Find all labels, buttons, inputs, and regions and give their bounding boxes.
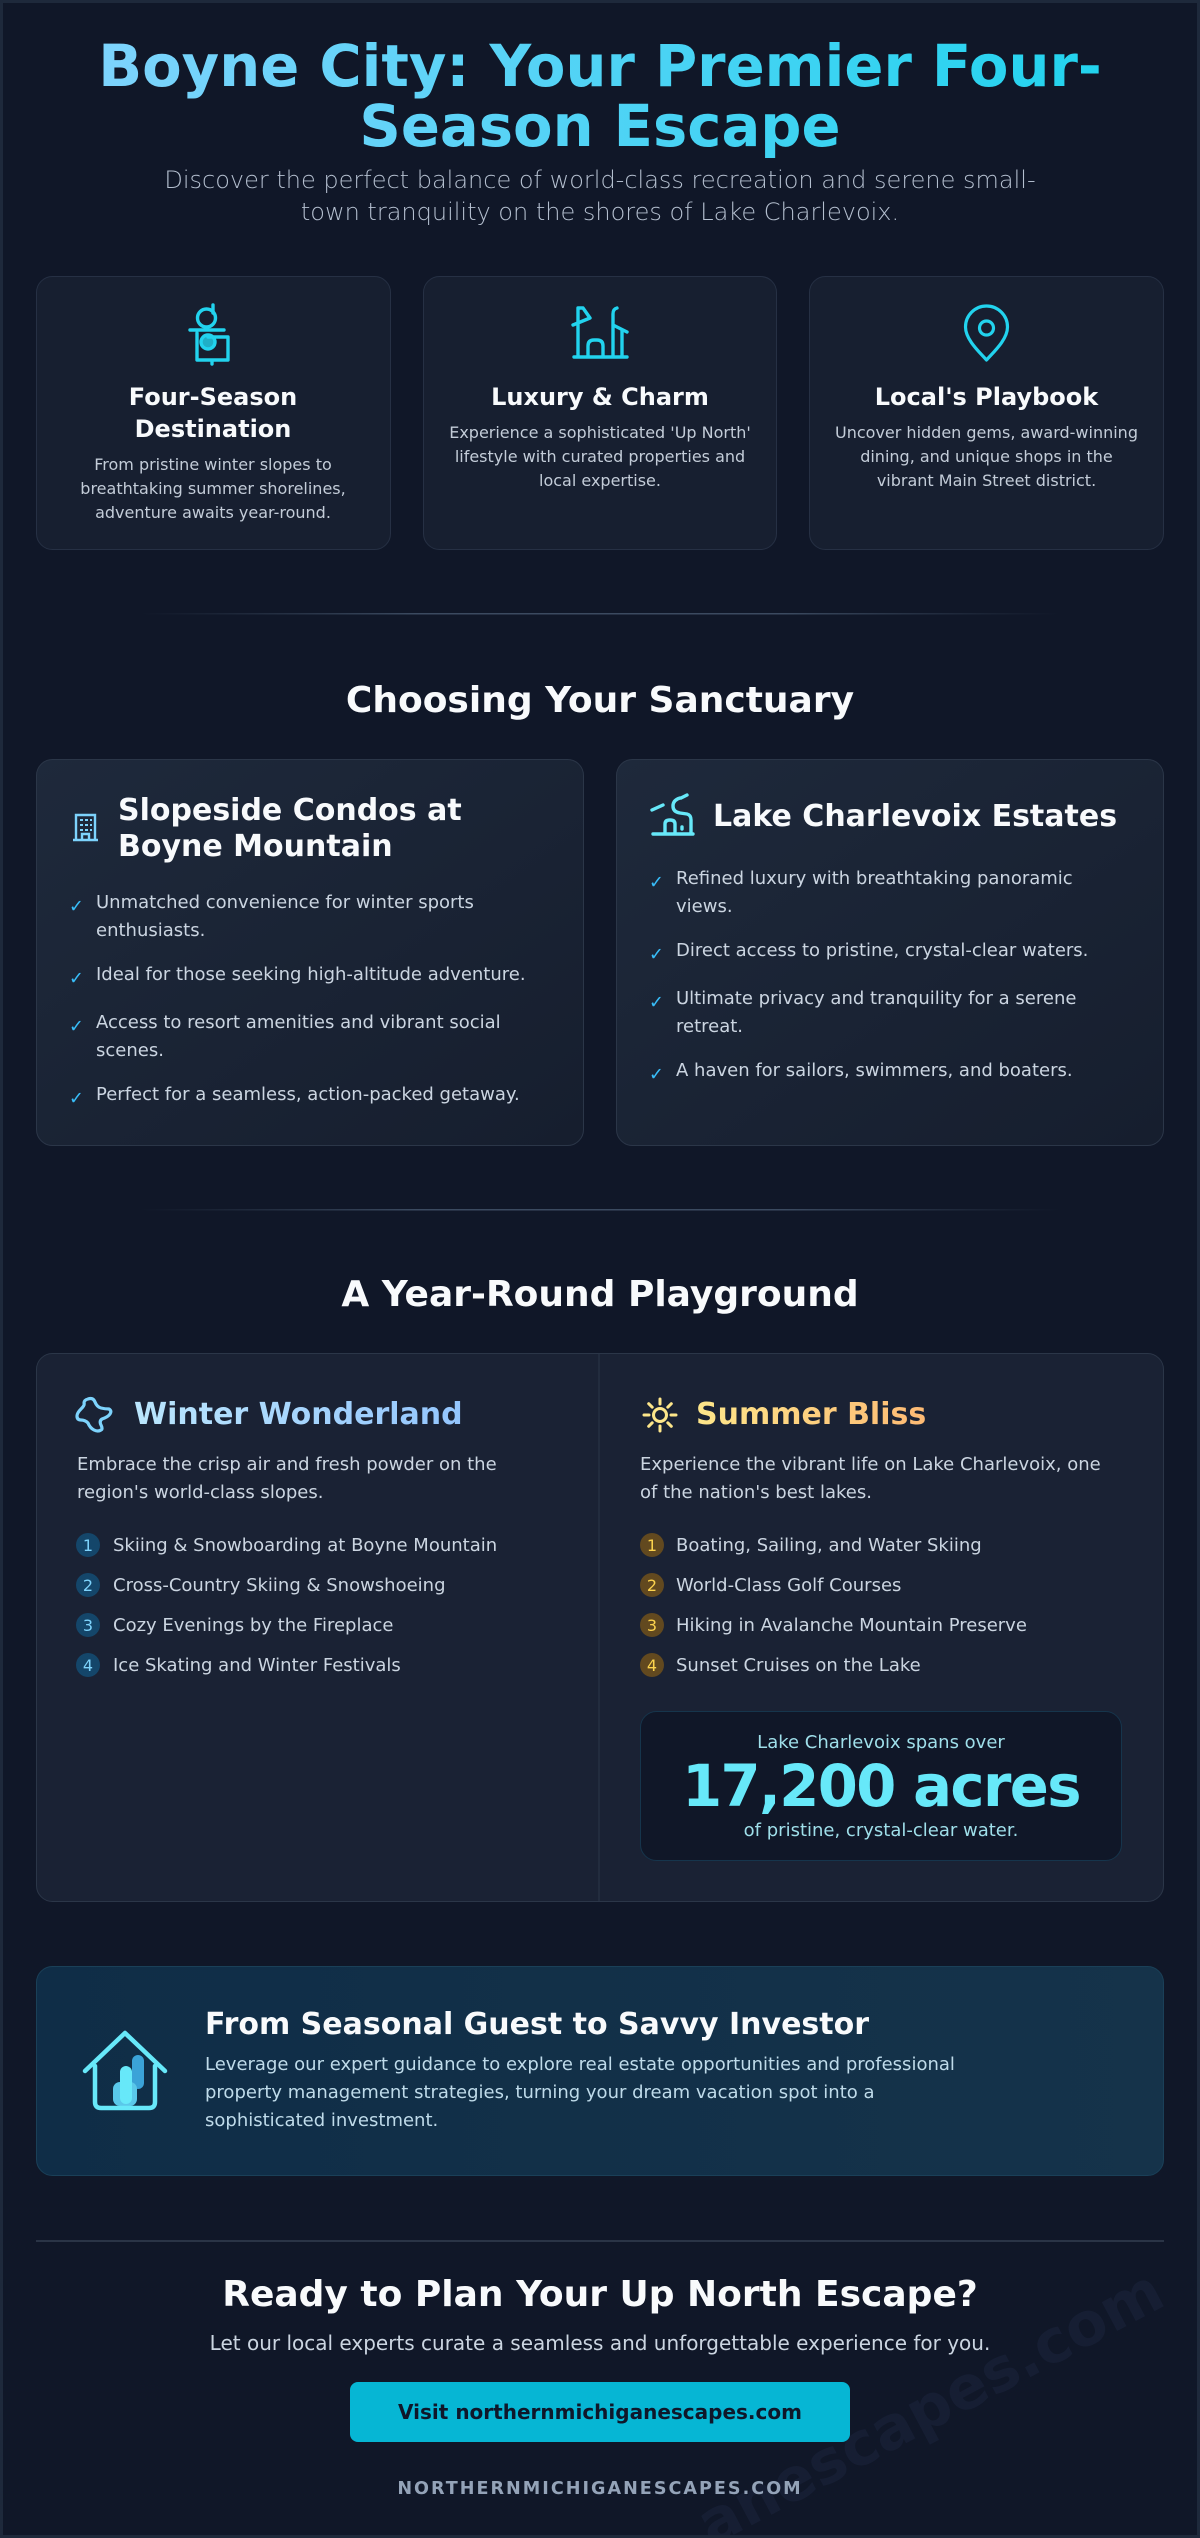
numbered list: 2 xyxy=(83,1576,93,1595)
description: Leverage our expert guidance to explore real estate opportunities and professional xyxy=(205,2054,955,2075)
heading: call to action: Ready to Plan Your Up North Escape? xyxy=(222,2274,978,2315)
checklist: ✓ xyxy=(649,1065,664,1085)
numbered list: Hiking in Avalanche Mountain Preserve xyxy=(676,1615,1027,1636)
description xyxy=(80,455,346,522)
numbered list: World-Class Golf Courses xyxy=(676,1575,901,1596)
summer column xyxy=(640,1397,1122,1860)
icon: snow xyxy=(77,1398,111,1431)
heading: Luxury & Charm xyxy=(491,383,709,411)
description: of the nation's best lakes. xyxy=(640,1482,872,1503)
heading: Local's Playbook xyxy=(875,383,1099,411)
heading: Summer Bliss xyxy=(696,1397,926,1432)
button: Visit northernmichiganescapes.com xyxy=(398,2400,802,2424)
description xyxy=(640,1454,1101,1503)
subtitle: town tranquility on the shores of Lake Charlevoix. xyxy=(301,198,899,226)
checklist: ✓ xyxy=(69,1017,84,1037)
checklist: ✓ xyxy=(649,873,664,893)
checklist: Ultimate privacy and tranquility for a serene xyxy=(676,988,1076,1009)
icon: sun xyxy=(644,1399,676,1431)
checklist: ✓ xyxy=(649,945,664,965)
numbered list: Boating, Sailing, and Water Skiing xyxy=(676,1535,982,1556)
numbered list: 4 xyxy=(647,1656,657,1675)
title xyxy=(98,33,1102,160)
numbered list: 1 xyxy=(647,1536,657,1555)
panel: luxury and charm xyxy=(424,276,776,550)
checklist: Direct access to pristine, crystal-clear waters. xyxy=(676,940,1088,961)
numbered list: 2 xyxy=(647,1576,657,1595)
heading xyxy=(118,793,462,864)
heading: Four-Season xyxy=(129,383,297,411)
heading: Slopeside Condos at xyxy=(118,793,462,828)
button xyxy=(350,2382,850,2442)
winter column xyxy=(76,1397,497,1677)
checklist: ✓ xyxy=(69,1089,84,1109)
icon: building xyxy=(73,815,98,840)
description: property management strategies, turning your dream vacation spot into a xyxy=(205,2082,875,2103)
numbered list: 3 xyxy=(83,1616,93,1635)
description: region's world-class slopes. xyxy=(77,1482,323,1503)
checklist: Refined luxury with breathtaking panoramic xyxy=(676,868,1073,889)
description xyxy=(77,1454,497,1503)
description: Experience a sophisticated 'Up North' xyxy=(449,423,751,442)
checklist: Perfect for a seamless, action-packed getaway. xyxy=(96,1084,520,1105)
checklist: scenes. xyxy=(96,1040,164,1061)
checklist: Unmatched convenience for winter sports xyxy=(96,892,474,913)
description xyxy=(449,423,751,490)
heading: From Seasonal Guest to Savvy Investor xyxy=(205,2007,869,2042)
checklist: retreat. xyxy=(676,1016,743,1037)
numbered list xyxy=(640,1533,1027,1677)
description: Uncover hidden gems, award-winning xyxy=(835,423,1138,442)
numbered list: Skiing & Snowboarding at Boyne Mountain xyxy=(113,1535,497,1556)
numbered list: 4 xyxy=(83,1656,93,1675)
subtitle xyxy=(164,166,1036,226)
heading: a year-round playground: A Year-Round Playground xyxy=(341,1274,859,1315)
checklist: views. xyxy=(676,896,733,917)
checklist: A haven for sailors, swimmers, and boaters. xyxy=(676,1060,1073,1081)
numbered list: 3 xyxy=(647,1616,657,1635)
panel: lake charlevoix estates xyxy=(616,760,1164,1146)
numbered list xyxy=(76,1533,497,1677)
icon: lakefront xyxy=(652,795,693,834)
panel: slopeside condos xyxy=(36,760,584,1146)
checklist: ✓ xyxy=(69,897,84,917)
callout: lake size: Lake Charlevoix spans over xyxy=(757,1732,1005,1753)
checklist xyxy=(69,892,526,1109)
panel: local's playbook xyxy=(810,276,1164,550)
heading: Destination xyxy=(135,415,291,443)
numbered list: Sunset Cruises on the Lake xyxy=(676,1655,921,1676)
title: Season Escape xyxy=(359,93,841,160)
icon: luxury xyxy=(573,308,627,357)
description: vibrant Main Street district. xyxy=(877,471,1096,490)
heading: Boyne Mountain xyxy=(118,829,393,864)
description: adventure awaits year-round. xyxy=(95,503,331,522)
heading: Winter Wonderland xyxy=(134,1397,463,1432)
text: call to action: Let our local experts curate a seamless and unforgettable experience for you. xyxy=(210,2331,990,2355)
checklist: ✓ xyxy=(649,993,664,1013)
panel: seasons xyxy=(36,1354,1164,1902)
checklist: ✓ xyxy=(69,969,84,989)
numbered list: 1 xyxy=(83,1536,93,1555)
title: Boyne City: Your Premier Four- xyxy=(98,33,1102,100)
numbered list: Ice Skating and Winter Festivals xyxy=(113,1655,401,1676)
checklist: Ideal for those seeking high-altitude adventure. xyxy=(96,964,526,985)
description: From pristine winter slopes to xyxy=(94,455,332,474)
description xyxy=(205,2054,955,2131)
callout: lake size xyxy=(640,1712,1122,1860)
icon: house with chart xyxy=(85,2033,165,2108)
subtitle: Discover the perfect balance of world-class recreation and serene small- xyxy=(164,166,1036,194)
description: Experience the vibrant life on Lake Charlevoix, one xyxy=(640,1454,1101,1475)
panel: four-season destination xyxy=(36,276,390,550)
callout: lake size: of pristine, crystal-clear water. xyxy=(744,1820,1018,1841)
heading: choosing your sanctuary: Choosing Your Sanctuary xyxy=(346,680,854,721)
description: dining, and unique shops in the xyxy=(860,447,1113,466)
icon: map pin xyxy=(966,306,1008,360)
description: breathtaking summer shorelines, xyxy=(80,479,346,498)
icon: four-season xyxy=(190,305,228,364)
description: sophisticated investment. xyxy=(205,2110,438,2131)
checklist xyxy=(649,868,1088,1085)
numbered list: Cross-Country Skiing & Snowshoeing xyxy=(113,1575,446,1596)
heading xyxy=(129,383,297,443)
callout: lake size: 17,200 acres xyxy=(682,1753,1080,1820)
footer url: NORTHERNMICHIGANESCAPES.COM xyxy=(397,2479,803,2499)
description: lifestyle with curated properties and xyxy=(455,447,745,466)
checklist: Access to resort amenities and vibrant social xyxy=(96,1012,501,1033)
numbered list: Cozy Evenings by the Fireplace xyxy=(113,1615,393,1636)
description: Embrace the crisp air and fresh powder on the xyxy=(77,1454,497,1475)
heading: Lake Charlevoix Estates xyxy=(713,799,1117,834)
panel: investor xyxy=(36,1966,1164,2176)
description xyxy=(835,423,1138,490)
checklist: enthusiasts. xyxy=(96,920,205,941)
description: local expertise. xyxy=(539,471,661,490)
